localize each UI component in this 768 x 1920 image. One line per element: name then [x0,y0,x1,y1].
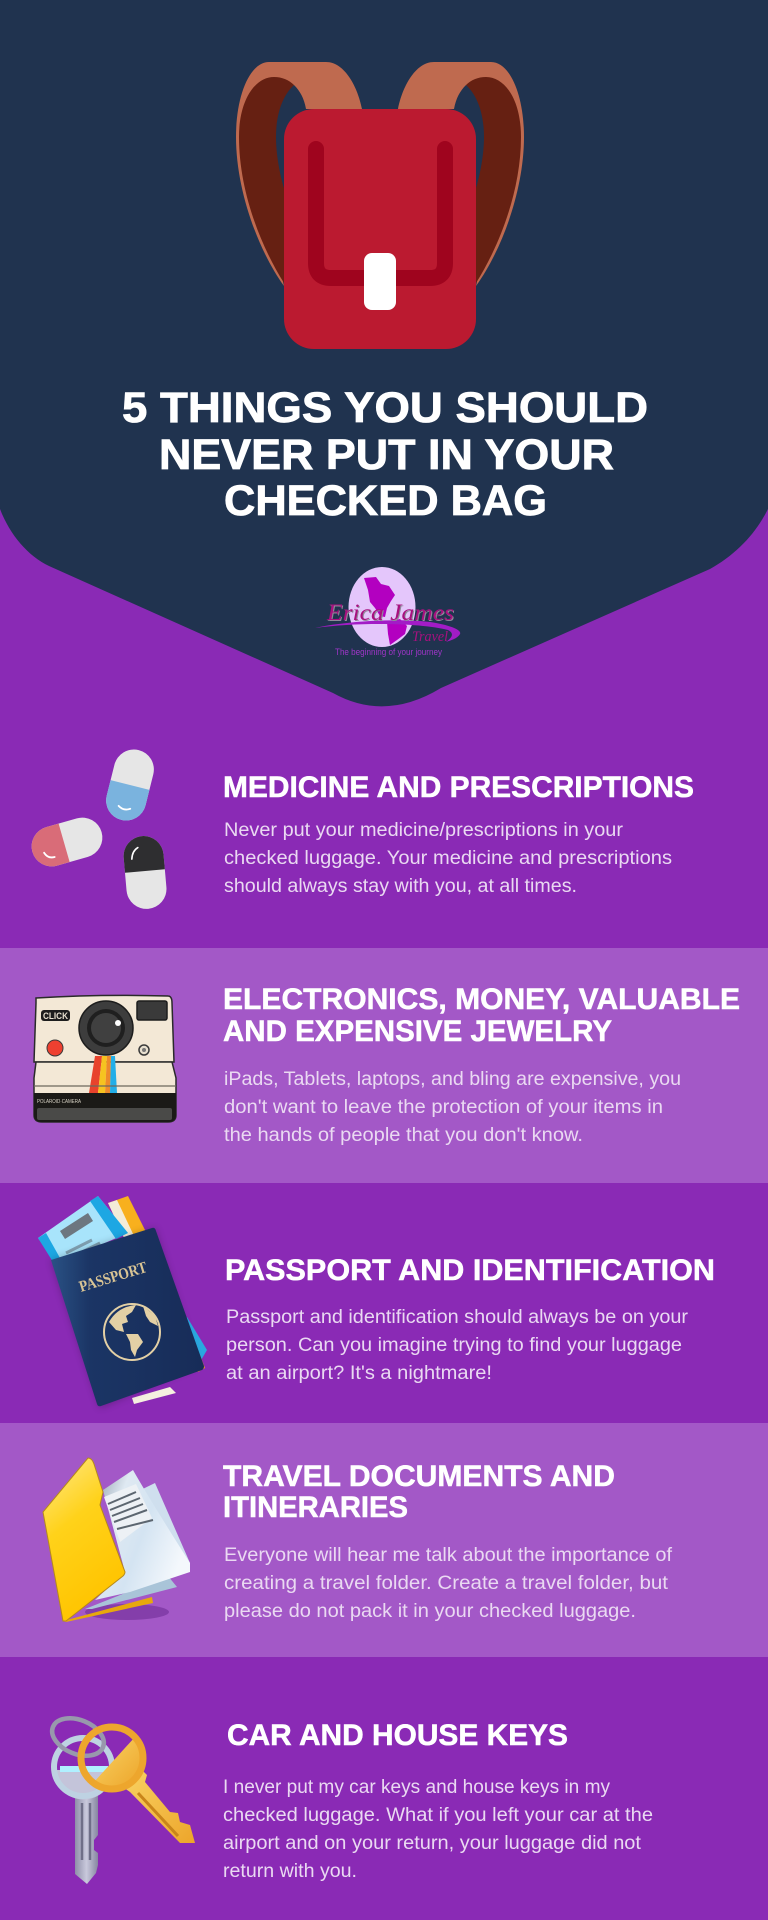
logo: Erica James Travel: The beginning of your journey [335,647,442,657]
body text: at an airport? It's a nightmare! [226,1363,492,1384]
body text: don't want to leave the protection of your items in [224,1097,663,1118]
body text: Never put your medicine/prescriptions in your [224,820,624,841]
body text [226,1307,689,1384]
body text: Passport and identification should always be on your [226,1307,689,1328]
heading: CAR AND HOUSE KEYS [227,1719,568,1752]
body text: checked luggage. What if you left your car at the [223,1805,653,1826]
body text: the hands of people that you don't know. [224,1125,583,1146]
icon: instant camera: POLAROID·CAMERA [37,1099,81,1105]
icon: passport with boarding passes: PASSPORT [77,1259,149,1296]
heading: ELECTRONICS, MONEY, VALUABLE [223,983,740,1016]
panel: header [0,0,768,706]
logo: Erica James Travel: Erica James [326,600,454,625]
title: NEVER PUT IN YOUR [159,431,614,479]
body text: checked luggage. Your medicine and prescriptions [224,848,672,869]
icon: passport with boarding passes [38,1196,207,1408]
heading: PASSPORT AND IDENTIFICATION [225,1254,715,1287]
panel: electronics, money, jewelry [0,948,768,1183]
logo: Erica James Travel: Travel [412,629,448,645]
heading: ITINERARIES [223,1491,408,1524]
heading: MEDICINE AND PRESCRIPTIONS [223,771,694,804]
title: 5 THINGS YOU SHOULD [122,384,648,432]
body text: airport and on your return, your luggage did not [223,1833,642,1854]
icon: yellow folder with papers [43,1458,190,1622]
body text: return with you. [223,1861,357,1882]
body text: please do not pack it in your checked luggage. [224,1601,636,1622]
body text [224,820,672,897]
panel: car and house keys [47,1711,653,1884]
body text [224,1545,673,1622]
body text: person. Can you imagine trying to find your luggage [226,1335,682,1356]
heading [223,983,740,1048]
logo: Erica James Travel: Erica James [327,601,455,626]
body text: creating a travel folder. Create a travel folder, but [224,1573,669,1594]
heading: AND EXPENSIVE JEWELRY [223,1015,612,1048]
panel: travel documents and itineraries [0,1423,768,1657]
panel: medicine and prescriptions [27,745,694,911]
body text: iPads, Tablets, laptops, and bling are expensive, you [224,1069,681,1090]
heading: TRAVEL DOCUMENTS AND [223,1460,615,1493]
icon: backpack [236,62,524,349]
icon: instant camera: CLICK [43,1011,68,1021]
body text: Everyone will hear me talk about the importance of [224,1545,673,1566]
body text [223,1777,653,1882]
body text [224,1069,681,1146]
logo: Erica James Travel [315,567,460,657]
heading [223,1460,615,1524]
title [122,384,648,525]
body text: I never put my car keys and house keys in my [223,1777,610,1798]
icon: pills [27,745,168,911]
icon: keys [47,1711,195,1884]
panel: passport and identification [38,1196,715,1408]
icon: instant camera [34,995,176,1122]
body text: should always stay with you, at all times. [224,876,577,897]
title: CHECKED BAG [224,477,547,525]
